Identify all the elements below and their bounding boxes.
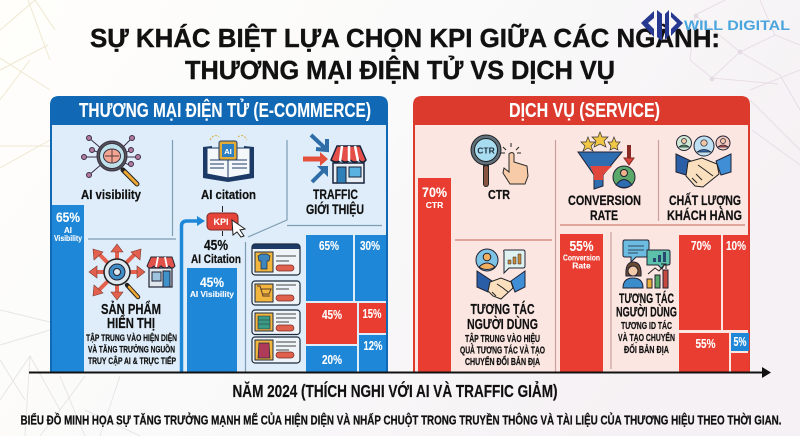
icon: customers and handshake: [676, 136, 731, 187]
text: tương tác người dùng (right): TƯƠNG TÁC: [619, 291, 674, 306]
icon: woman with chat and chart: [623, 240, 670, 288]
arrow: timeline axis: [29, 367, 771, 378]
bar: 65% AI Visibility: [52, 205, 84, 372]
logo: Will Digital: [641, 10, 790, 41]
icon: small store: [147, 257, 175, 287]
bar: 45% AI Visibility: 45%: [200, 274, 224, 290]
text: tương tác người dùng (left): TƯƠNG TÁC: [470, 301, 535, 318]
icon: conversion funnel: [578, 132, 635, 189]
panel header: service: DỊCH VỤ (SERVICE): [509, 100, 660, 122]
text: tương tác người dùng (right): [616, 291, 677, 356]
icon: AI citation book: [203, 136, 254, 182]
arrow: growth to KPI: [182, 216, 205, 372]
bar: 55% Conversion Rate: Rate: [572, 260, 591, 270]
bar: 45% AI Visibility: AI Visibility: [190, 289, 234, 299]
icon: user and handshake: [476, 249, 525, 299]
label: AI visibility: AI visibility: [81, 187, 142, 202]
label: chất lượng khách hàng: KHÁCH HÀNG: [667, 208, 742, 223]
logo: Will Digital: WILL DIGITAL: [684, 17, 790, 33]
text: tương tác người dùng (right): NGƯỜI DÙNG: [616, 304, 677, 320]
panel header: service: [414, 97, 749, 125]
panel header: e-commerce: [51, 97, 387, 125]
panel header: e-commerce: THƯƠNG MẠI ĐIỆN TỬ (E-COMMERCE): [79, 98, 371, 122]
bar: 65% AI Visibility: 65%: [56, 210, 80, 225]
bar: 65% AI Visibility: Visibility: [54, 234, 82, 243]
treemap: e-commerce: 45%: [322, 307, 342, 322]
KPI badge with cursor: [207, 206, 245, 237]
treemap: service: 10%: [726, 238, 746, 253]
label: conversion rate: [568, 193, 641, 223]
bar: 70% CTR: CTR: [426, 200, 443, 210]
text: tương tác người dùng (left): TẬP TRUNG VÀO HIỆU: [465, 332, 540, 345]
text: tương tác người dùng (right): ĐỐI BẢN ĐỊA: [624, 342, 669, 356]
treemap: e-commerce: 12%: [364, 338, 383, 353]
label: conversion rate: RATE: [590, 208, 618, 223]
bar: 55% Conversion Rate: Conversion: [563, 252, 600, 262]
label: 45% AI Citation: AI Citation: [191, 252, 241, 266]
label: CTR: CTR: [488, 187, 511, 202]
title: THƯƠNG MẠI ĐIỆN TỬ VS DỊCH VỤ: [185, 54, 615, 85]
treemap: service: 55%: [696, 336, 716, 351]
panel: e-commerce: [51, 97, 387, 373]
panel: service: [414, 97, 749, 373]
text: tương tác người dùng (right): TƯƠNG ID TÁC: [621, 319, 672, 332]
treemap: e-commerce: 20%: [322, 352, 342, 367]
text: sản phẩm hiển thị: SẢN PHẨM: [101, 300, 161, 318]
icon: CTR magnifier and hand: CTR: [477, 146, 495, 156]
label: chất lượng khách hàng: CHẤT LƯỢNG: [669, 193, 741, 208]
label: traffic giới thiệu: GIỚI THIỆU: [306, 202, 364, 217]
text: sản phẩm hiển thị: HIỂN THỊ: [107, 314, 155, 332]
KPI badge with cursor: KPI: [213, 217, 229, 227]
label: traffic giới thiệu: TRAFFIC: [313, 187, 358, 202]
icon: AI visibility magnifier: [82, 136, 140, 184]
text: tương tác người dùng (right): VÀ TẠO CHUYỂN: [618, 331, 675, 344]
text: tương tác người dùng (left): NGƯỜI DÙNG: [467, 315, 538, 333]
treemap: e-commerce: [306, 235, 386, 372]
treemap: e-commerce: 15%: [362, 306, 382, 321]
icon: AI citation book: AI: [224, 147, 232, 156]
text: sản phẩm hiển thị: TRUY CẬP AI & TRỰC TIẾP: [88, 355, 176, 367]
treemap: e-commerce: 30%: [360, 238, 380, 253]
treemap: e-commerce: 65%: [319, 238, 339, 253]
icon: referral traffic store: [303, 135, 366, 183]
label: chất lượng khách hàng: [667, 193, 742, 223]
label: conversion rate: CONVERSION: [568, 193, 641, 208]
treemap: service: 70%: [691, 238, 711, 253]
text: tương tác người dùng (left): [460, 301, 545, 368]
treemap: service: [679, 235, 749, 372]
bar: 55% Conversion Rate: [560, 234, 603, 372]
label: AI citation: AI citation: [201, 187, 256, 202]
icon: product display arrows: [89, 244, 145, 300]
bar: 70% CTR: 70%: [422, 184, 447, 200]
product cards: [252, 244, 300, 363]
text: tương tác người dùng (left): CHUYỂN ĐỔI BẢN ĐỊA: [465, 355, 540, 368]
bar: 45% AI Visibility: [187, 268, 237, 372]
bar: 70% CTR: [418, 178, 451, 372]
title: [90, 23, 720, 85]
bar: 65% AI Visibility: AI: [64, 226, 72, 235]
text: sản phẩm hiển thị: [86, 300, 177, 367]
text: tương tác người dùng (left): QUẢ TƯƠNG TÁC VÀ TẠO: [460, 344, 545, 356]
axis label: NĂM 2024 (THÍCH NGHI VỚI AI VÀ TRAFFIC GIẢM): [232, 380, 558, 401]
text: sản phẩm hiển thị: TẬP TRUNG VÀO HIỆN DIỆN: [86, 332, 177, 344]
bar: 55% Conversion Rate: 55%: [570, 239, 594, 255]
title: SỰ KHÁC BIỆT LỰA CHỌN KPI GIỮA CÁC NGÀNH:: [90, 23, 720, 53]
label: 45% AI Citation: [191, 238, 241, 266]
treemap: service: 5%: [734, 334, 747, 349]
text: sản phẩm hiển thị: VÀ TĂNG TRƯỞNG NGUỒN: [88, 344, 175, 356]
label: 45% AI Citation: 45%: [204, 238, 228, 254]
icon: CTR magnifier and hand: [471, 135, 528, 184]
label: traffic giới thiệu: [306, 187, 364, 217]
